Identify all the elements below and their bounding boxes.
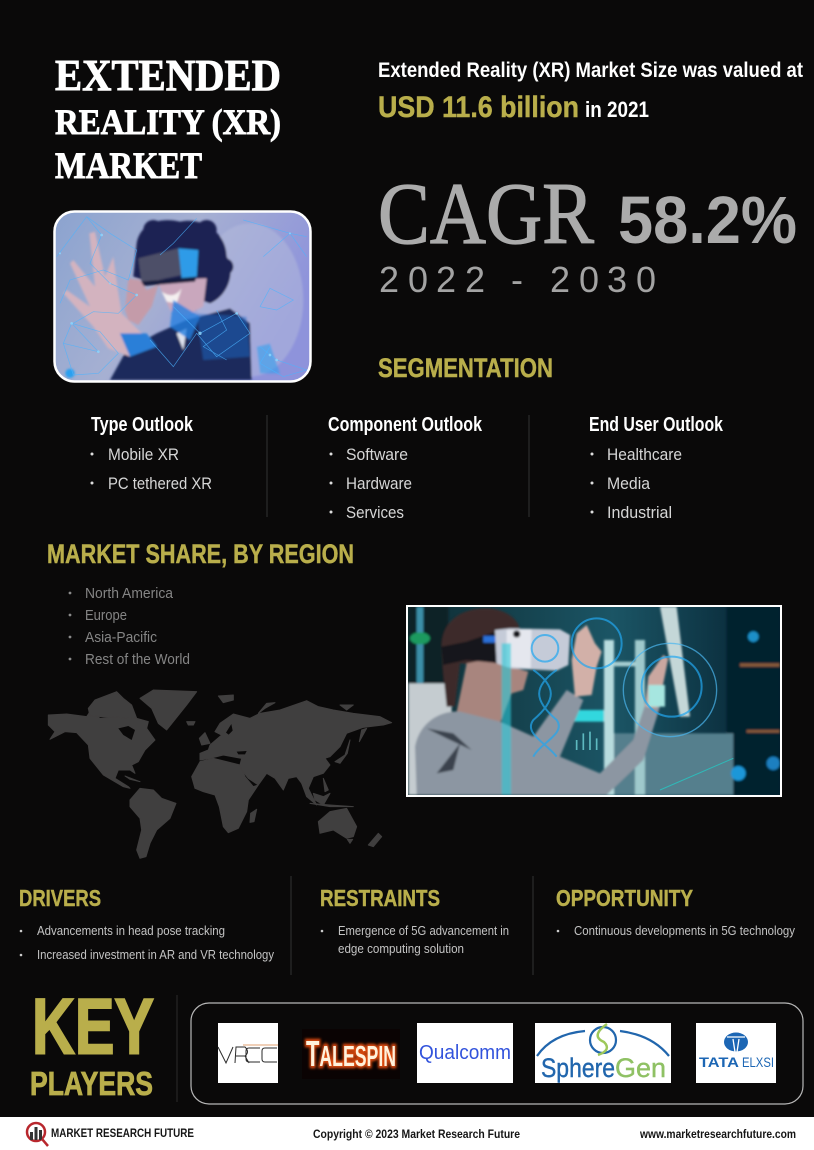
- footer bar: MARKET RESEARCH FUTURE: [51, 1126, 194, 1140]
- holographic overlays: [531, 618, 717, 757]
- logo: Tata Elxsi: ELXSI: [742, 1054, 774, 1070]
- panel: drivers: [19, 885, 274, 962]
- headset: [138, 248, 182, 283]
- segment: component outlook: Services: [346, 504, 404, 522]
- panel: restraints: [320, 885, 509, 956]
- market size statement: [378, 59, 803, 124]
- logo: TaleSpin: TALESPIN: [306, 1033, 396, 1074]
- VR strap: [442, 630, 500, 665]
- hair and head: [442, 608, 520, 707]
- panel: opportunity: [556, 885, 795, 938]
- key players heading: [30, 982, 154, 1102]
- segment: end user outlook: Media: [607, 475, 651, 493]
- logo: SphereGen: [535, 1023, 671, 1083]
- region list: North America: [85, 585, 174, 602]
- logo: TaleSpin: TALESPIN: [306, 1033, 396, 1074]
- segment: end user outlook: End User Outlook: [589, 414, 724, 436]
- VR headset: [495, 628, 570, 671]
- network lines: [57, 217, 307, 377]
- panel: drivers: Increased investment in AR and VR technology: [37, 947, 274, 962]
- logo: VRCC: [218, 1023, 278, 1083]
- segment: type outlook: PC tethered XR: [108, 475, 212, 493]
- CAGR figure: CAGR: [378, 166, 594, 263]
- logo: Qualcomm: [417, 1023, 513, 1083]
- segment: component outlook: Hardware: [346, 475, 412, 493]
- panel: restraints: edge computing solution: [338, 941, 464, 956]
- panel: opportunity: OPPORTUNITY: [556, 885, 693, 911]
- torso: [110, 308, 252, 380]
- segment: type outlook: [90, 414, 212, 493]
- CAGR figure: [378, 166, 797, 300]
- panel: key player logos: [191, 1003, 803, 1104]
- logo: Tata Elxsi: TATA: [699, 1054, 739, 1070]
- panel: restraints: Emergence of 5G advancement in: [338, 923, 509, 938]
- segment: type outlook: Type Outlook: [91, 414, 194, 436]
- market size statement: in 2021: [585, 97, 649, 122]
- key players heading: KEY: [32, 982, 154, 1070]
- world map: [48, 690, 392, 858]
- CAGR figure: 58.2%: [618, 183, 797, 258]
- segment: end user outlook: Industrial: [607, 504, 672, 522]
- panel: drivers: DRIVERS: [19, 885, 101, 911]
- segmentation heading: SEGMENTATION: [378, 353, 553, 383]
- hair: [133, 220, 231, 303]
- segment: component outlook: Software: [346, 446, 408, 464]
- logo: SphereGen: Gen: [615, 1053, 666, 1083]
- segment: component outlook: Component Outlook: [328, 414, 483, 436]
- region list: Rest of the World: [85, 651, 190, 668]
- panel: restraints: RESTRAINTS: [320, 885, 440, 911]
- footer bar: Copyright © 2023 Market Research Future: [313, 1127, 520, 1141]
- logo: Qualcomm: Qualcomm: [419, 1042, 511, 1064]
- icon: market research future logo: [27, 1123, 48, 1146]
- logo: SphereGen: Sphere: [541, 1053, 615, 1083]
- market size statement: USD 11.6 billion: [378, 91, 579, 124]
- region list: [69, 585, 190, 668]
- hand left: [63, 232, 142, 357]
- footer bar: [0, 1117, 814, 1150]
- photo: woman with holographic DNA display: [407, 606, 781, 796]
- hands: [572, 625, 602, 697]
- region list: Europe: [85, 607, 127, 624]
- map: americas and greenland: [48, 690, 197, 858]
- title: REALITY (XR): [55, 102, 281, 142]
- CAGR figure: 2022 - 2030: [379, 259, 656, 300]
- segment: type outlook: Mobile XR: [108, 446, 179, 464]
- logo: Tata Elxsi: [696, 1023, 776, 1083]
- shadows on sweater: [427, 728, 472, 773]
- region list: Asia-Pacific: [85, 629, 157, 646]
- photo: woman wearing VR headset: [54, 211, 311, 382]
- title: MARKET: [55, 146, 202, 187]
- segment: component outlook: [328, 414, 483, 522]
- segment: end user outlook: Healthcare: [607, 446, 682, 464]
- title: EXTENDED: [55, 51, 281, 100]
- key players heading: PLAYERS: [30, 1065, 153, 1102]
- neck and face: [157, 278, 207, 315]
- market share heading: MARKET SHARE, BY REGION: [47, 539, 354, 569]
- title: [55, 51, 281, 187]
- segment: end user outlook: [589, 414, 724, 522]
- logo: TaleSpin: [302, 1029, 400, 1079]
- body: [415, 690, 660, 795]
- logo: VRCC: VRCC: [218, 1062, 221, 1064]
- map: africa, eurasia and oceania: [192, 695, 392, 847]
- panel: drivers: Advancements in head pose tracking: [37, 923, 225, 938]
